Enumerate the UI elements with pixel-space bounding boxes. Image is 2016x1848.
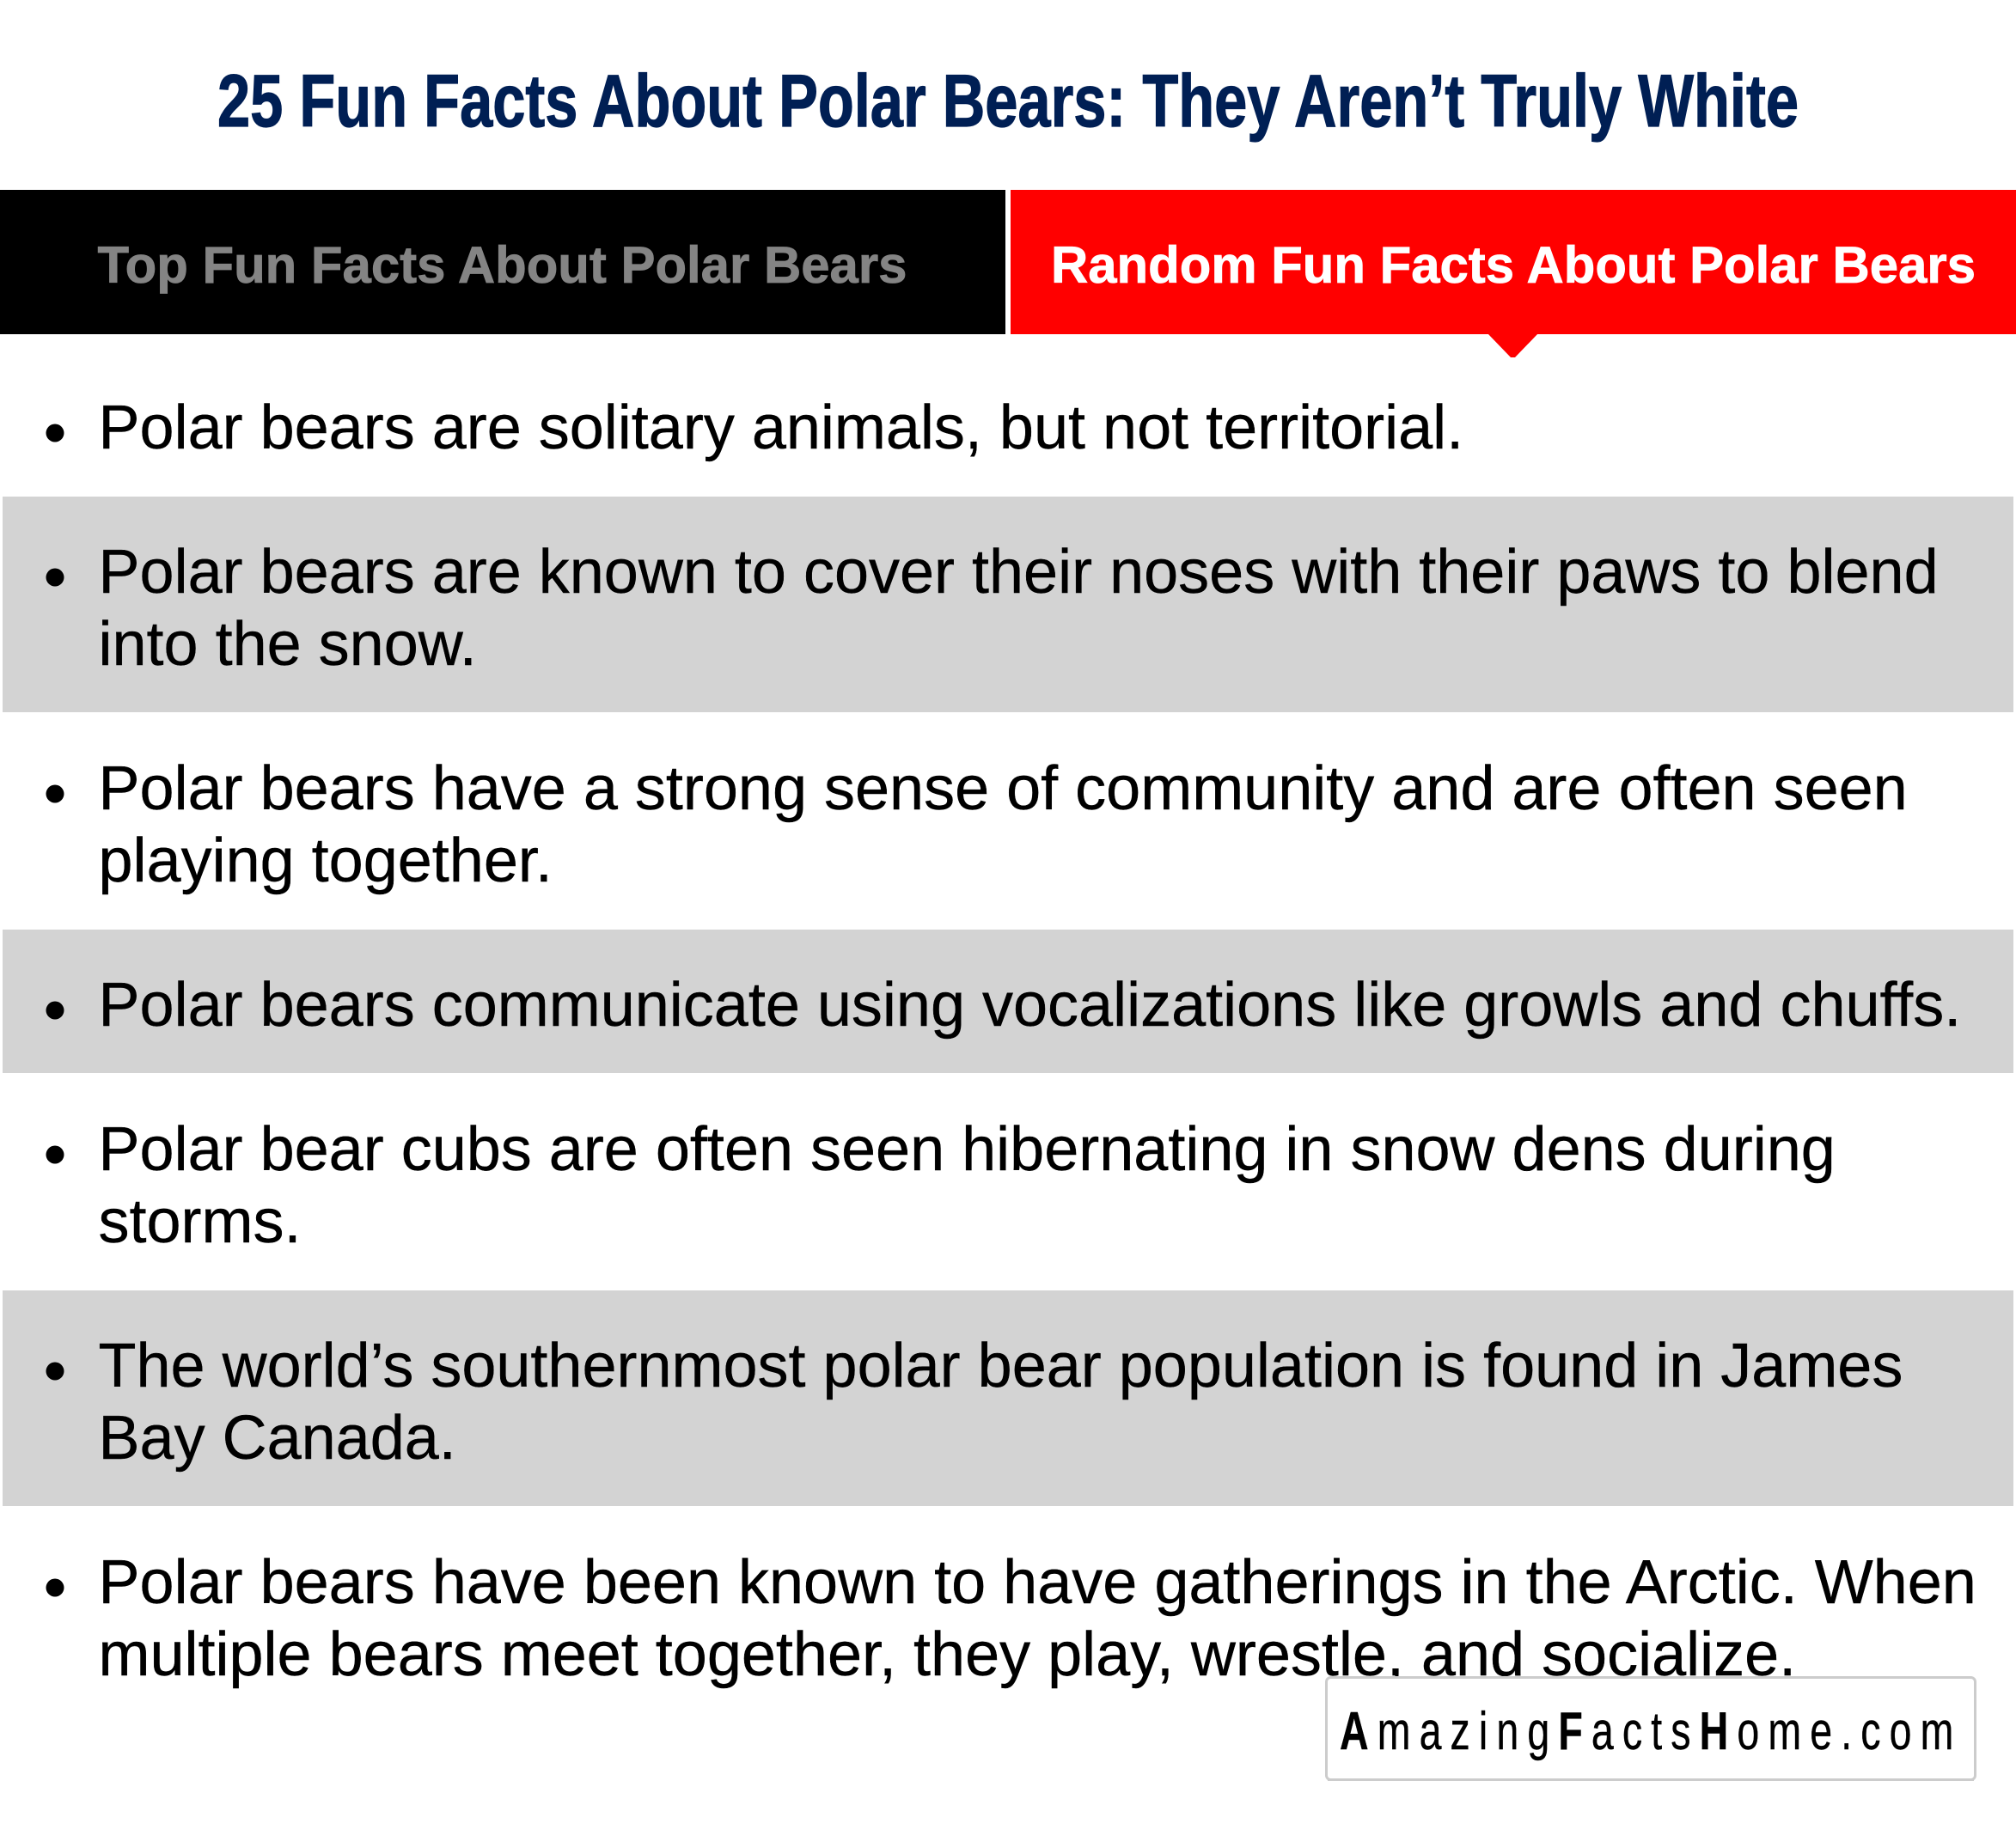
fact 7: Polar bears have been known to have gatherings in the Arctic. When [98, 1548, 1976, 1617]
fact 6 row: Bay Canada. [98, 1404, 456, 1473]
fact 3: Polar bears have a strong sense of community and are often seen [98, 754, 1908, 823]
fact 5: Polar bear cubs are often seen hibernating in snow dens during [98, 1115, 1836, 1184]
watermark badge: AmazingFactsHome.com [1340, 1700, 1962, 1761]
fact 2 row [3, 497, 2013, 712]
fact 3 [46, 754, 1908, 895]
fact 6 row [3, 1290, 2013, 1506]
tab: random fun facts (active) [1011, 190, 2016, 357]
fact 7: multiple bears meet together, they play, wrestle, and socialize. [98, 1620, 1796, 1689]
fact 2 row: into the snow. [98, 610, 477, 679]
fact 5: storms. [98, 1187, 302, 1256]
tab: top fun facts [0, 190, 1005, 334]
watermark badge [1327, 1677, 1975, 1781]
fact 6 row: The world’s southernmost polar bear population is found in James [98, 1332, 1903, 1400]
fact 7 [46, 1548, 1976, 1689]
tab: top fun facts: Top Fun Facts About Polar Bears [98, 236, 907, 294]
fact 1: Polar bears are solitary animals, but not territorial. [98, 393, 1463, 462]
fact 5 [46, 1115, 1836, 1256]
fact 2 row: Polar bears are known to cover their noses with their paws to blend [98, 538, 1939, 607]
fact 4 row: Polar bears communicate using vocalizations like growls and chuffs. [98, 971, 1961, 1040]
fact 3: playing together. [98, 826, 553, 895]
fact 4 row [3, 930, 2013, 1073]
tab: random fun facts (active): Random Fun Facts About Polar Bears [1051, 236, 1976, 294]
